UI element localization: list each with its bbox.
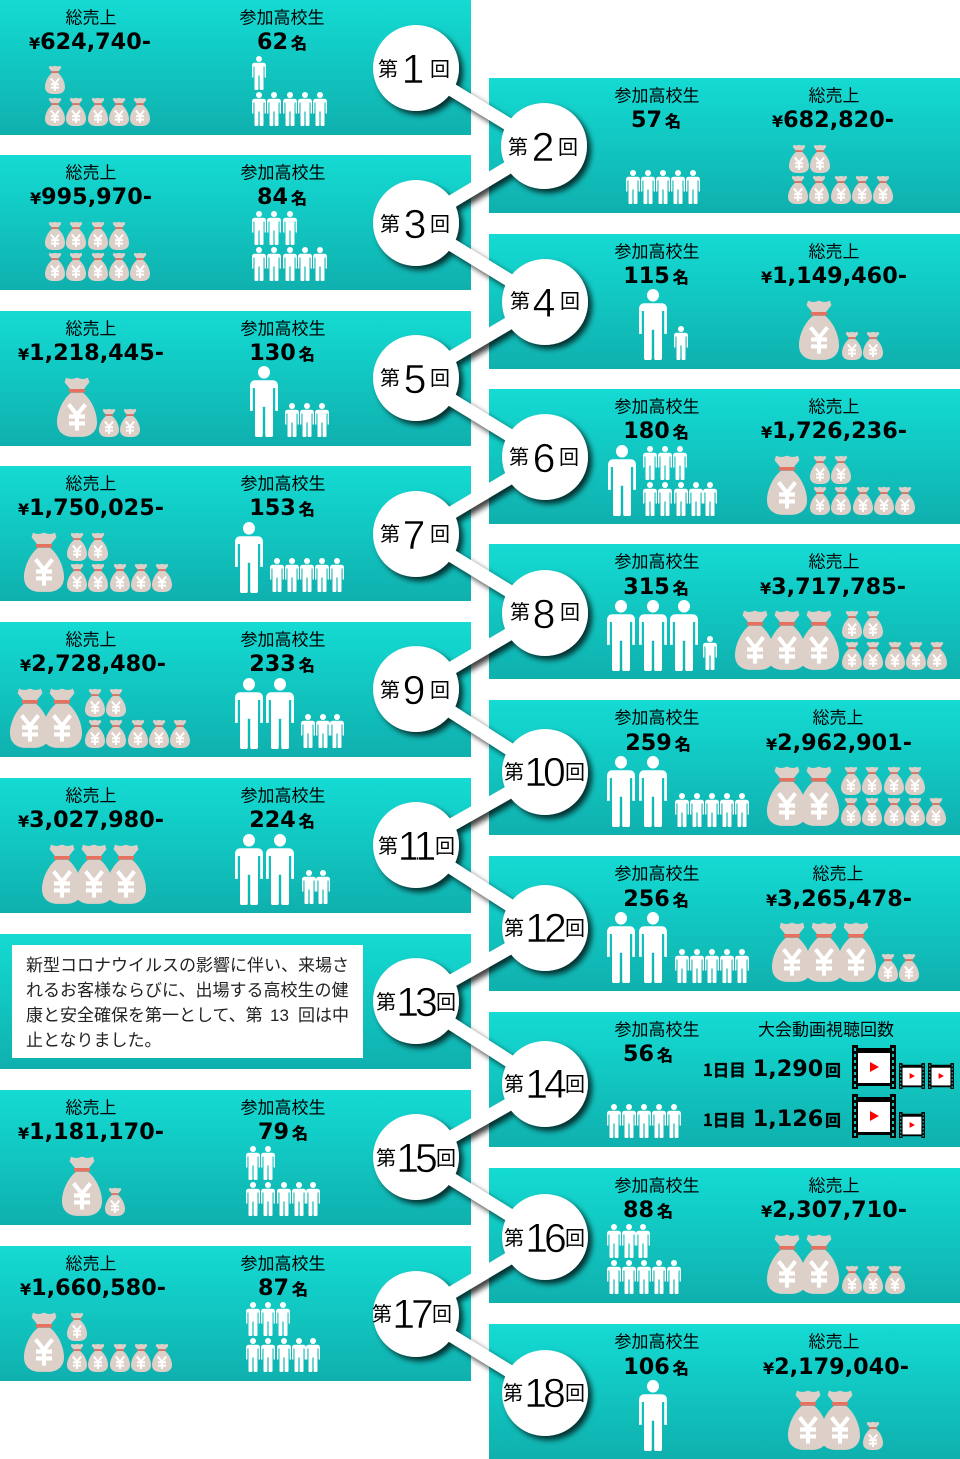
panel: round 4 (489, 234, 960, 369)
badge: round 13 (376, 979, 456, 1025)
label: students: 参加高校生 (240, 1098, 326, 1118)
value: students: 88名 (623, 1197, 673, 1223)
label: students: 参加高校生 (614, 398, 700, 416)
label: students: 参加高校生 (614, 708, 700, 728)
badge: round 9 (380, 667, 450, 713)
badge: round 15: 15 (396, 1135, 437, 1181)
badge: round 13: 第 (376, 986, 396, 1015)
label: sales: 総売上 (808, 398, 860, 416)
value: day 2 views: 1日目 (703, 1107, 746, 1131)
badge: round 1: 回 (430, 53, 450, 82)
badge: round 1 (378, 46, 450, 92)
value: sales: ¥3,027,980- (18, 807, 164, 833)
value: sales: ¥624,740- (29, 29, 151, 55)
badge: round 4: 4 (533, 280, 555, 326)
label: students: 参加高校生 (614, 552, 700, 572)
value: sales: ¥995,970- (30, 184, 152, 210)
icon: money bags (772, 923, 919, 982)
label: sales: 総売上 (808, 242, 860, 262)
panel: round 7 (0, 466, 471, 601)
badge: round 9: 9 (403, 667, 425, 713)
icon: people (639, 289, 688, 360)
value: students: 130名 (249, 340, 315, 366)
icon: money bags (62, 1157, 125, 1216)
value: day 1 views (703, 1056, 841, 1082)
icon: people (235, 834, 330, 905)
badge: round 11: 回 (435, 830, 455, 859)
badge: round 2: 2 (532, 124, 554, 170)
label: students: 参加高校生 (240, 320, 326, 338)
notice box (12, 945, 363, 1058)
panel: round 10 (489, 700, 960, 835)
badge: round 3: 回 (430, 208, 450, 237)
value: sales: ¥1,750,025- (18, 495, 164, 521)
badge: round 10 (504, 749, 585, 795)
label: sales: 総売上 (66, 1098, 116, 1118)
icon: people (235, 678, 344, 749)
label: sales: 総売上 (66, 474, 116, 494)
value: sales: ¥2,179,040- (763, 1354, 909, 1380)
icon: people (235, 522, 344, 593)
label: sales: 総売上 (808, 552, 860, 572)
icon: person (639, 1380, 667, 1451)
value: students: 57名 (631, 107, 681, 133)
icon: money bags (57, 378, 140, 437)
label: sales: 総売上 (808, 1176, 860, 1196)
badge: round 8: 回 (560, 596, 580, 625)
value: students: 84名 (257, 184, 307, 210)
badge: round 14: 第 (504, 1068, 524, 1097)
icon: people (626, 170, 700, 204)
value: students: 315名 (623, 574, 689, 600)
panel: round 2 (489, 78, 960, 213)
label: sales: 総売上 (66, 786, 116, 806)
icon: money bags (45, 66, 150, 126)
badge: round 12 (504, 905, 585, 951)
icon: money bags (42, 845, 146, 904)
label: sales: 総売上 (66, 1254, 116, 1274)
label: sales: 総売上 (66, 8, 116, 28)
value: sales: ¥1,149,460- (761, 263, 907, 289)
label: students: 参加高校生 (614, 1332, 700, 1352)
panel: round 15 (0, 1090, 471, 1225)
badge: round 7: 7 (403, 512, 425, 558)
badge: round 12: 第 (504, 912, 524, 941)
value: students: 62名 (257, 29, 307, 55)
badge: round 13: 13 (396, 979, 436, 1025)
value: sales: ¥2,962,901- (766, 730, 912, 756)
icon: people (250, 366, 329, 437)
label: sales: 総売上 (66, 630, 116, 650)
badge: round 13: 回 (436, 986, 456, 1015)
icon: money bags (799, 301, 883, 360)
value: students: 259名 (625, 730, 691, 756)
badge: round 9: 第 (380, 674, 400, 703)
badge: round 7 (380, 512, 450, 558)
value: sales: ¥682,820- (772, 107, 894, 133)
label: students: 参加高校生 (240, 8, 324, 28)
badge: round 5: 第 (380, 362, 400, 391)
badge: round 5 (380, 356, 450, 402)
value: students: 233名 (249, 651, 315, 677)
value: students: 106名 (623, 1354, 689, 1380)
icon: money bags (767, 1235, 905, 1294)
label: students: 参加高校生 (240, 786, 326, 806)
value: sales: ¥1,181,170- (18, 1119, 164, 1145)
timeline connector and circles (373, 25, 588, 1436)
icon: people (246, 1146, 320, 1216)
badge: round 15 (376, 1135, 456, 1181)
icon: people (607, 1104, 681, 1138)
panel: round 5 (0, 311, 471, 446)
badge: round 8 (510, 591, 580, 637)
badge: round 15: 回 (436, 1142, 456, 1171)
badge: round 4: 第 (510, 285, 530, 314)
value: students: 56名 (623, 1041, 673, 1067)
label: sales: 総売上 (808, 1332, 860, 1352)
panel: round 6 (489, 389, 960, 524)
badge: round 7: 第 (380, 518, 400, 547)
notice text: 回は中 (298, 1006, 349, 1025)
badge: round 17: 17 (392, 1291, 432, 1337)
badge: round 5: 5 (404, 356, 426, 402)
icon: money bags (24, 533, 172, 592)
badge: round 12: 12 (525, 905, 565, 951)
label: students: 参加高校生 (240, 1254, 326, 1274)
badge: round 15: 第 (376, 1142, 396, 1171)
badge: round 7: 回 (430, 518, 450, 547)
badge: round 10: 回 (565, 756, 585, 785)
badge: round 2: 回 (558, 131, 578, 160)
panel: round 17 (0, 1246, 471, 1381)
panel: round 12 (489, 856, 960, 991)
panel: round 9 (0, 622, 471, 757)
icon: people (607, 756, 749, 827)
badge: round 17 (372, 1291, 452, 1337)
badge: round 6: 第 (509, 441, 529, 470)
icon: people (252, 211, 327, 281)
icon: film reels day 1 (852, 1045, 954, 1089)
notice text: れるお客様ならびに、出場する高校生の健 (26, 981, 348, 1000)
icon: money bags (735, 611, 947, 670)
value: students: 256名 (623, 886, 689, 912)
icon: people (252, 56, 327, 126)
value: day 2 views (703, 1106, 841, 1132)
badge: round 8: 第 (510, 596, 530, 625)
value: students: 180名 (623, 418, 689, 444)
badge: round 2: 第 (508, 131, 528, 160)
panel: round 8 (489, 544, 960, 679)
badge: round 3 (380, 201, 450, 247)
badge: round 11: 第 (378, 830, 398, 859)
value: students: 153名 (249, 495, 315, 521)
label: students: 参加高校生 (240, 474, 326, 494)
badge: round 11: 11 (398, 823, 434, 869)
label: students: 参加高校生 (240, 164, 326, 182)
value: students: 224名 (249, 807, 315, 833)
badge: round 16 (504, 1215, 585, 1261)
notice text: 止となりました。 (26, 1031, 162, 1050)
icon: film reels day 2 (852, 1094, 925, 1138)
label: students: 参加高校生 (614, 1176, 700, 1196)
badge: round 16: 16 (525, 1215, 565, 1261)
notice text: 新型コロナウイルスの影響に伴い、来場さ (26, 956, 349, 975)
icon: money bags (788, 145, 893, 204)
icon: money bags (10, 689, 190, 748)
value: day 1 views: 回 (825, 1057, 841, 1081)
badge: round 1: 第 (378, 53, 398, 82)
badge: round 12: 回 (565, 912, 585, 941)
notice text: 康と安全確保を第一として、第 (26, 1006, 263, 1025)
badge: round 17: 第 (372, 1298, 392, 1327)
badge: round 14 (504, 1061, 585, 1107)
badge: round 9: 回 (430, 674, 450, 703)
badge: round 10: 第 (504, 756, 524, 785)
badge: round 18: 第 (503, 1377, 523, 1406)
badge: round 4 (510, 280, 580, 326)
badge: round 18: 回 (565, 1377, 585, 1406)
icon: money bags (788, 1391, 883, 1450)
value: day 2 views: 回 (825, 1107, 841, 1131)
badge: round 8: 8 (533, 591, 555, 637)
icon: people (246, 1302, 320, 1372)
panel: round 1 (0, 0, 471, 135)
value: students: 87名 (258, 1275, 308, 1301)
label: students: 参加高校生 (240, 630, 326, 650)
icon: people (607, 600, 717, 671)
value: sales: ¥3,265,478- (766, 886, 912, 912)
value: sales: ¥3,717,785- (760, 574, 906, 600)
icon: people (607, 1224, 681, 1294)
badge: round 17: 回 (432, 1298, 452, 1327)
panel: round 14 (489, 1012, 960, 1147)
notice text: 13 (270, 1006, 289, 1025)
badge: round 18: 18 (524, 1370, 565, 1416)
badge: round 14: 14 (525, 1061, 566, 1107)
icon: money bags (45, 222, 150, 281)
badge: round 6: 回 (559, 441, 579, 470)
label: video views: 大会動画視聴回数 (758, 1020, 894, 1040)
label: students: 参加高校生 (614, 1020, 700, 1040)
label: sales: 総売上 (812, 864, 864, 884)
label: students: 参加高校生 (614, 242, 700, 262)
badge: round 1: 1 (402, 46, 424, 92)
badge: round 5: 回 (430, 362, 450, 391)
value: students: 79名 (258, 1119, 308, 1145)
badge: round 14: 回 (565, 1068, 585, 1097)
panel: round 18 (489, 1324, 960, 1459)
badge: round 6 (509, 435, 579, 481)
badge: round 18 (503, 1370, 585, 1416)
badge: round 2 (508, 124, 578, 170)
label: sales: 総売上 (812, 708, 864, 728)
value: sales: ¥1,726,236- (761, 418, 907, 444)
value: sales: ¥1,660,580- (20, 1275, 166, 1301)
value: day 2 views: 1,126 (753, 1106, 823, 1132)
label: students: 参加高校生 (614, 864, 700, 884)
value: students: 115名 (623, 263, 689, 289)
panel: round 13 (0, 934, 471, 1069)
badge: round 6: 6 (533, 435, 555, 481)
icon: people (608, 445, 717, 516)
badge: round 16: 第 (504, 1222, 524, 1251)
value: sales: ¥1,218,445- (18, 340, 164, 366)
icon: money bags (767, 767, 946, 826)
panel: round 16 (489, 1168, 960, 1303)
badge: round 4: 回 (560, 285, 580, 314)
badge: round 3: 3 (404, 201, 426, 247)
icon: money bags (24, 1313, 172, 1372)
label: sales: 総売上 (66, 320, 116, 338)
value: day 1 views: 1,290 (753, 1056, 823, 1082)
label: students: 参加高校生 (614, 86, 700, 106)
badge: round 16: 回 (565, 1222, 585, 1251)
value: sales: ¥2,728,480- (20, 651, 166, 677)
badge: round 11 (378, 823, 455, 869)
panel: round 3 (0, 155, 471, 290)
badge: round 3: 第 (380, 208, 400, 237)
label: sales: 総売上 (66, 164, 116, 182)
panel: round 11 (0, 778, 471, 913)
label: sales: 総売上 (808, 86, 860, 106)
icon: money bags (767, 456, 915, 515)
icon: people (607, 912, 749, 983)
value: sales: ¥2,307,710- (761, 1197, 907, 1223)
badge: round 10: 10 (524, 749, 565, 795)
value: day 1 views: 1日目 (703, 1057, 746, 1081)
